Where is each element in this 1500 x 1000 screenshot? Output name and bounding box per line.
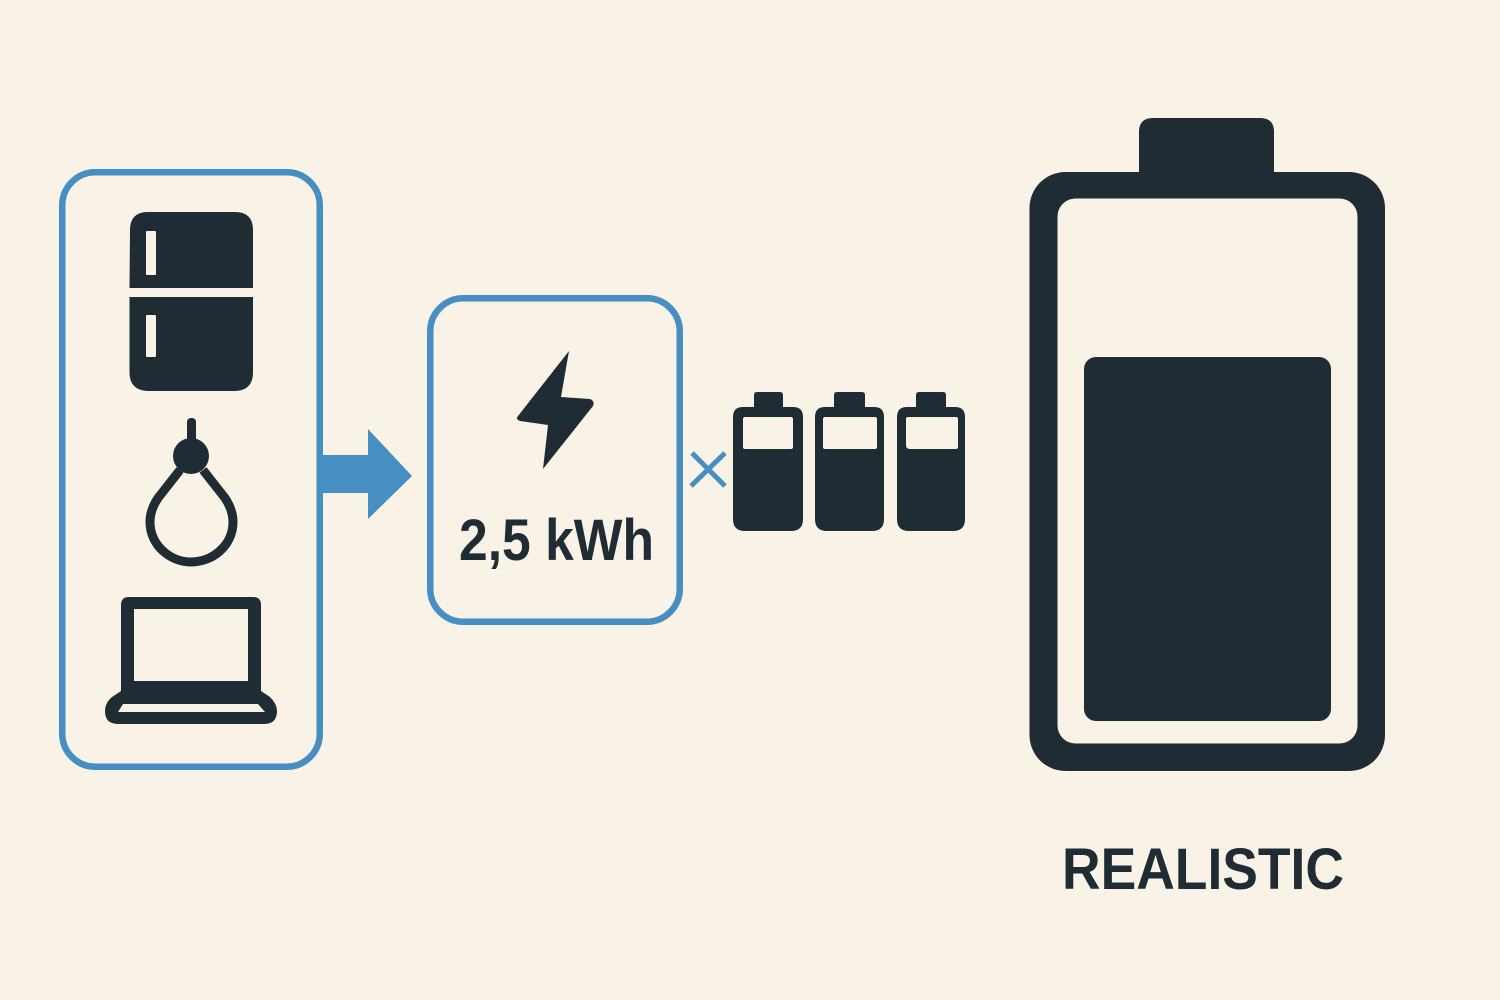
icon: large battery: [1030, 118, 1385, 771]
icon: lightning bolt: [517, 351, 594, 469]
icon: multiply sign: [691, 453, 725, 486]
icon: light bulb: [150, 418, 233, 562]
icon: small battery 1: [733, 392, 803, 531]
panel: energy: [430, 298, 680, 622]
icon: small battery 2: [815, 392, 884, 531]
icon: fridge: [130, 212, 253, 391]
icon: small battery 3: [897, 392, 965, 531]
arrow: to energy box: [319, 429, 412, 519]
icon: laptop: [105, 597, 277, 724]
energy value: 2,5 kWh: [459, 508, 654, 573]
label: realistic: REALISTIC: [1062, 837, 1344, 902]
panel: appliances: [62, 172, 320, 767]
